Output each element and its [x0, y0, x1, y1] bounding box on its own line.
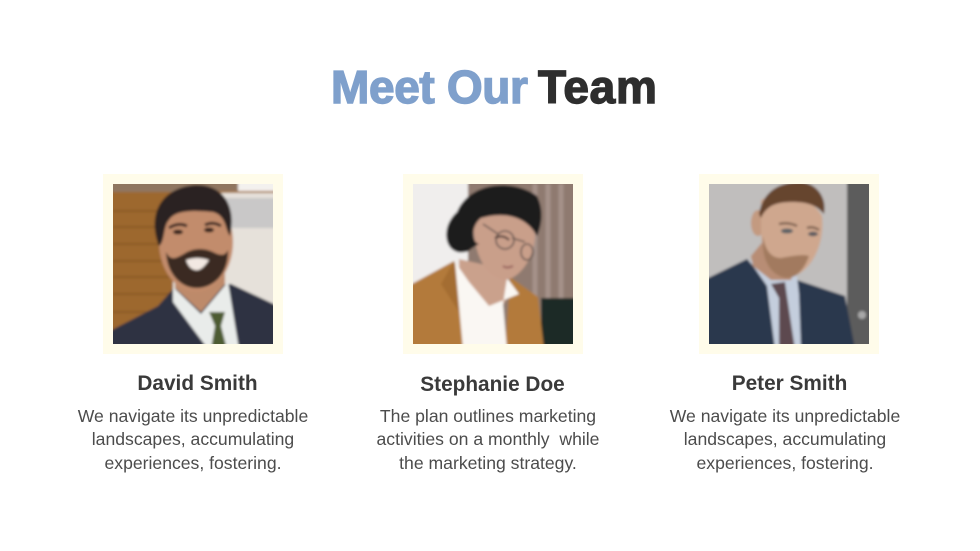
tie [209, 312, 227, 349]
description: David Smith: experiences, fostering. [104, 453, 282, 473]
hair [155, 185, 232, 246]
description: Stephanie Doe [377, 406, 599, 473]
ear [751, 210, 765, 236]
description: Stephanie Doe: activities on a monthly while [377, 429, 599, 449]
shirt [173, 282, 239, 349]
description: Peter Smith [670, 406, 900, 473]
hair [446, 185, 542, 252]
title [331, 61, 658, 113]
neck [458, 258, 508, 306]
photo card: Peter Smith [699, 174, 879, 354]
glasses [483, 224, 525, 242]
description: Stephanie Doe: the marketing strategy. [399, 453, 577, 473]
name: David Smith: David Smith [137, 372, 258, 395]
hair [759, 182, 825, 218]
beard [763, 236, 809, 278]
name: Stephanie Doe: Stephanie Doe [420, 373, 565, 396]
description: Stephanie Doe: The plan outlines marketing [380, 406, 596, 426]
title: Meet Our [331, 61, 528, 113]
tie [771, 282, 795, 349]
description: David Smith: We navigate its unpredictable [78, 406, 308, 426]
neck [750, 242, 793, 282]
description: David Smith [78, 406, 308, 473]
title: Team [538, 61, 658, 113]
photo card: Stephanie Doe [403, 174, 583, 354]
face [473, 211, 535, 280]
description: Peter Smith: We navigate its unpredictable [670, 406, 900, 426]
description: Peter Smith: experiences, fostering. [696, 453, 874, 473]
face [761, 195, 822, 278]
face [158, 208, 234, 284]
jacket [408, 261, 544, 349]
name: Peter Smith: Peter Smith [732, 372, 847, 395]
jacket [113, 282, 273, 344]
photo card: David Smith [103, 174, 283, 354]
shirt [749, 260, 801, 349]
jacket [704, 259, 855, 349]
neck [174, 272, 226, 313]
shirt [455, 262, 519, 349]
beard [166, 249, 228, 288]
description: Peter Smith: landscapes, accumulating [684, 429, 886, 449]
description: David Smith: landscapes, accumulating [92, 429, 294, 449]
